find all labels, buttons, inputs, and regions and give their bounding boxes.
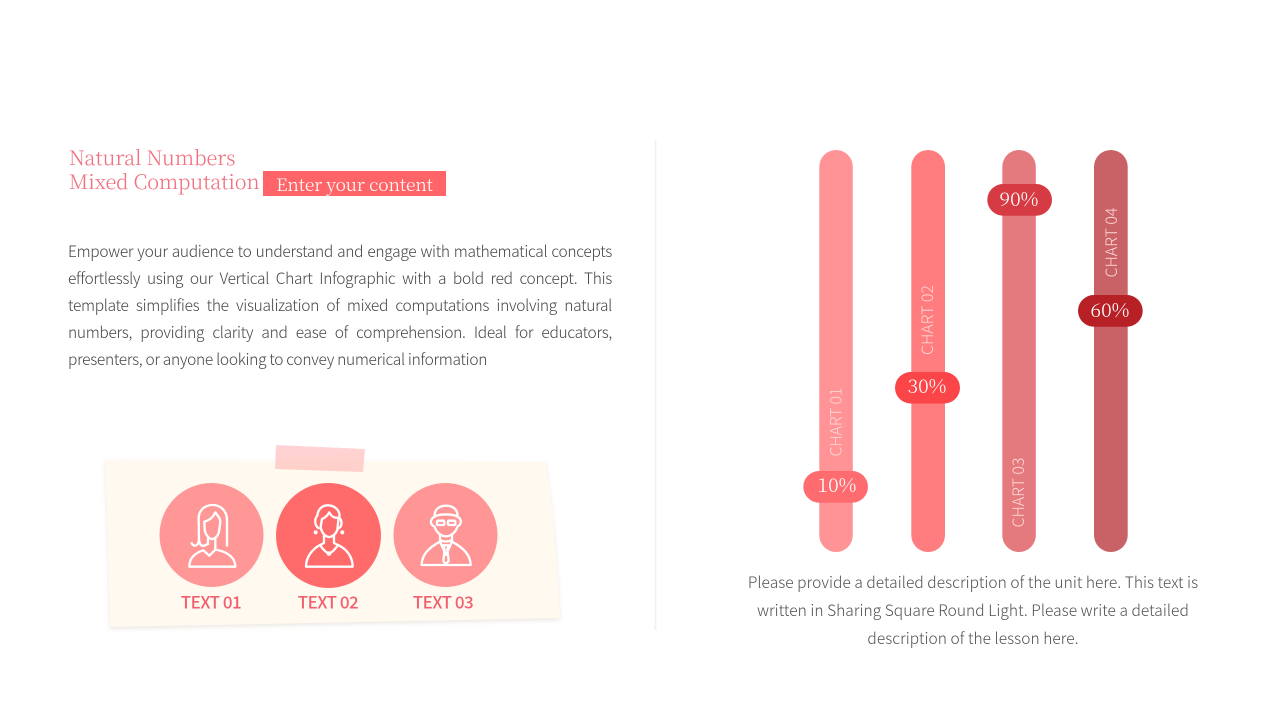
- body paragraph: Empower your audience to understand and engage with mathematical concepts: [68, 240, 612, 262]
- person 3: [394, 483, 498, 587]
- body paragraph: [68, 240, 612, 370]
- label: text 03: TEXT 03: [413, 588, 473, 614]
- subtitle tag: Enter your content: [276, 172, 433, 197]
- label chart 02: CHART 02: [914, 285, 938, 355]
- icon: woman with short hair: [306, 505, 353, 567]
- pill 90%: [987, 184, 1052, 216]
- label: text 02: TEXT 02: [298, 588, 358, 614]
- icon: woman with long hair: [189, 505, 235, 567]
- body paragraph: effortlessly using our Vertical Chart Infographic with a bold red concept. This: [68, 267, 612, 289]
- circle 3: [394, 483, 498, 587]
- paper sheet: [105, 460, 560, 627]
- pill 30%: [895, 371, 960, 404]
- track chart 03: [1002, 150, 1036, 552]
- track chart 01: [819, 150, 853, 552]
- bar 2: [895, 150, 960, 552]
- bar 4: [1078, 150, 1143, 552]
- person 1: [160, 483, 264, 587]
- chart description: description of the lesson here.: [867, 627, 1079, 649]
- pill 90%: 90%: [1000, 184, 1038, 212]
- label chart 04: CHART 04: [1098, 207, 1122, 278]
- label: text 01: TEXT 01: [181, 588, 241, 614]
- title line 1: Natural Numbers: [69, 142, 235, 171]
- body paragraph: presenters, or anyone looking to convey numerical information: [68, 348, 487, 370]
- person 2: [276, 483, 381, 588]
- vertical bar chart: [803, 150, 1143, 552]
- label chart 01: CHART 01: [822, 388, 846, 456]
- pill 30%: 30%: [908, 371, 946, 399]
- icon: man with glasses and tie: [422, 506, 471, 565]
- track chart 04: [1094, 150, 1128, 552]
- bar 3: [987, 150, 1052, 552]
- title line 2: Mixed Computation: [69, 166, 259, 195]
- body paragraph: template simplifies the visualization of mixed computations involving natural: [68, 294, 612, 316]
- paper note panel: [105, 445, 560, 627]
- pill 10%: [803, 470, 868, 503]
- tape: [275, 445, 365, 472]
- pill 60%: [1078, 295, 1143, 327]
- label chart 03: CHART 03: [1005, 458, 1029, 528]
- chart description: Please provide a detailed description of the unit here. This text is: [748, 571, 1198, 593]
- track chart 02: [911, 150, 945, 552]
- circle 1: [160, 483, 264, 587]
- chart description: [748, 571, 1198, 649]
- pill 60%: 60%: [1091, 295, 1129, 323]
- circle 2: [276, 483, 381, 588]
- pill 10%: 10%: [818, 470, 856, 498]
- body paragraph: numbers, providing clarity and ease of comprehension. Ideal for educators,: [68, 321, 612, 343]
- bar 1: [803, 150, 868, 552]
- chart description: written in Sharing Square Round Light. Please write a detailed: [757, 599, 1189, 621]
